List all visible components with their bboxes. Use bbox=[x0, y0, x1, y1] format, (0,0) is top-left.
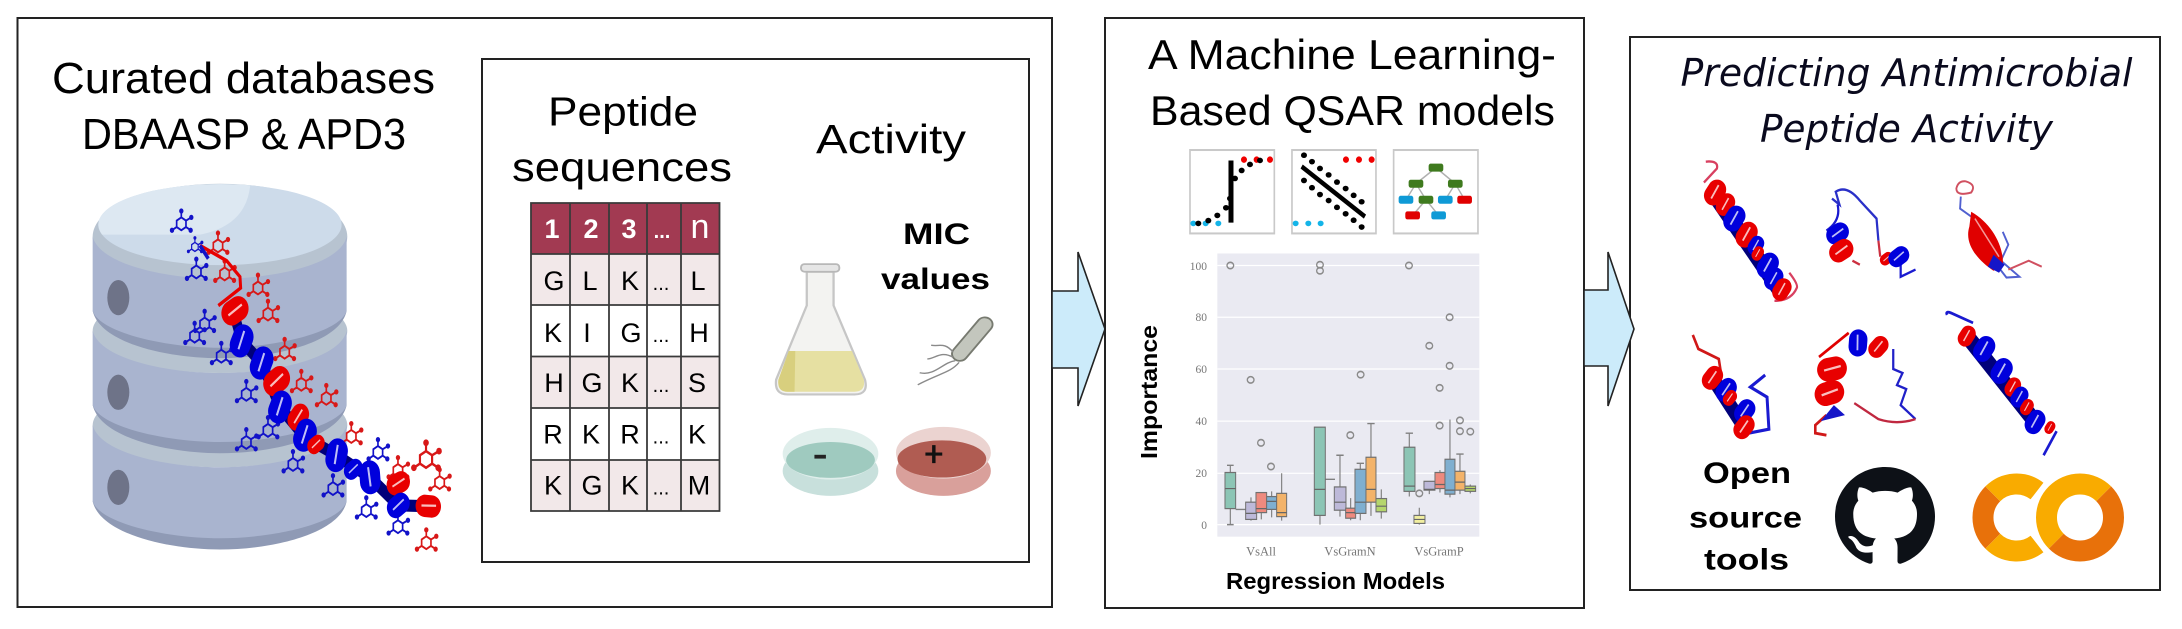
heading: machine learning QSAR models: Based QSAR models bbox=[1150, 87, 1555, 134]
table: peptide sequence matrix: ... bbox=[653, 478, 669, 500]
peptide structure 4 bbox=[1693, 335, 1769, 433]
heading: peptide sequences bbox=[512, 88, 732, 190]
peptide structure 1 bbox=[1704, 161, 1797, 301]
table: peptide sequence matrix: K bbox=[621, 368, 639, 398]
label: open source tools bbox=[1689, 457, 1802, 577]
y axis tick labels: 60 bbox=[1196, 364, 1207, 376]
heading: predicting antimicrobial peptide activity bbox=[1680, 51, 2133, 151]
panel: curated databases bbox=[18, 18, 1052, 607]
table: peptide sequence matrix: H bbox=[544, 368, 564, 398]
table: peptide sequence matrix: K bbox=[544, 318, 562, 348]
heading: predicting antimicrobial peptide activity: Predicting Antimicrobial bbox=[1680, 51, 2133, 95]
table: peptide sequence matrix: G bbox=[543, 266, 565, 296]
panel: QSAR models bbox=[1105, 18, 1584, 608]
table: peptide sequence matrix: L bbox=[582, 266, 598, 296]
table: peptide sequence matrix: G bbox=[581, 470, 603, 500]
icon: logistic regression bbox=[1190, 150, 1274, 233]
heading: activity: Activity bbox=[816, 116, 967, 162]
table: peptide sequence matrix: K bbox=[621, 470, 639, 500]
icon: decision tree bbox=[1394, 150, 1478, 233]
y axis tick labels: 20 bbox=[1196, 468, 1207, 480]
heading: machine learning QSAR models: A Machine Learning- bbox=[1148, 31, 1556, 78]
icon: support vector machine bbox=[1292, 150, 1376, 233]
y axis tick labels bbox=[1190, 261, 1207, 532]
y axis title: Importance bbox=[1136, 325, 1162, 459]
chart: feature importance box plots bbox=[1136, 253, 1479, 594]
icon: petri dish negative bbox=[783, 428, 878, 496]
table: peptide sequence matrix: K bbox=[544, 470, 562, 500]
heading: peptide sequences: sequences bbox=[512, 144, 732, 190]
x axis category labels: VsGramN bbox=[1324, 544, 1376, 558]
x axis title: Regression Models bbox=[1226, 568, 1445, 594]
table: peptide sequence matrix: ... bbox=[653, 426, 669, 448]
table: peptide sequence matrix: G bbox=[620, 318, 642, 348]
icon: Google Colab logo bbox=[1983, 484, 2113, 551]
icon: petri dish positive bbox=[896, 427, 991, 496]
icon: peptide structure with side chains bbox=[171, 209, 451, 551]
heading: curated databases: Curated databases bbox=[52, 54, 435, 103]
table: peptide sequence matrix: G bbox=[581, 368, 603, 398]
label: MIC values bbox=[881, 218, 990, 296]
group: peptide 3D structures bbox=[1693, 161, 2057, 455]
heading: peptide sequences: Peptide bbox=[548, 88, 698, 134]
peptide structure 3 bbox=[1956, 181, 2042, 278]
y axis tick labels: 100 bbox=[1190, 261, 1207, 273]
table: peptide sequence matrix: K bbox=[688, 420, 706, 450]
peptide structure 5 bbox=[1815, 333, 1916, 435]
x axis category labels: VsAll bbox=[1246, 544, 1276, 558]
x axis category labels: VsGramP bbox=[1414, 544, 1464, 558]
table: peptide sequence matrix: M bbox=[688, 470, 710, 500]
table: peptide sequence matrix: ... bbox=[653, 273, 669, 295]
icon: bacterium bbox=[918, 324, 985, 385]
y axis tick labels: 80 bbox=[1196, 312, 1207, 324]
table: peptide sequence matrix: R bbox=[543, 420, 563, 450]
heading: machine learning QSAR models bbox=[1148, 31, 1556, 134]
table: peptide sequence matrix: n bbox=[691, 208, 709, 246]
table: peptide sequence matrix: ... bbox=[654, 221, 670, 243]
table: peptide sequence matrix: R bbox=[620, 420, 640, 450]
y axis tick labels: 40 bbox=[1196, 416, 1207, 428]
heading: curated databases: DBAASP & APD3 bbox=[82, 110, 406, 159]
label: MIC values: values bbox=[881, 263, 990, 296]
table: peptide sequence matrix: L bbox=[690, 266, 706, 296]
peptide structure 2 bbox=[1826, 189, 1916, 277]
table: peptide sequence matrix: 1 bbox=[544, 214, 560, 244]
icon: GitHub logo bbox=[1835, 467, 1935, 564]
heading: predicting antimicrobial peptide activity: Peptide Activity bbox=[1760, 107, 2053, 151]
panel: peptide sequences and activity bbox=[482, 59, 1029, 562]
table: peptide sequence matrix: 2 bbox=[583, 214, 599, 244]
table: peptide sequence matrix: ... bbox=[653, 375, 669, 397]
y axis tick labels: 0 bbox=[1201, 520, 1207, 532]
arrow: models to predictions bbox=[1584, 252, 1634, 406]
icon: culture flask bbox=[776, 264, 866, 394]
arrow: databases to models bbox=[1052, 252, 1105, 406]
heading: curated databases bbox=[52, 54, 435, 159]
table: peptide sequence matrix bbox=[531, 203, 720, 511]
table: peptide sequence matrix: K bbox=[621, 266, 639, 296]
table: peptide sequence matrix: S bbox=[688, 368, 706, 398]
label: open source tools: Open bbox=[1703, 457, 1791, 490]
table: peptide sequence matrix: I bbox=[583, 318, 591, 348]
table: peptide sequence matrix: K bbox=[582, 420, 600, 450]
label: MIC values: MIC bbox=[903, 218, 970, 251]
x axis category labels bbox=[1246, 544, 1464, 558]
icon: database cylinder bbox=[93, 176, 347, 550]
table: peptide sequence matrix: H bbox=[689, 318, 709, 348]
label: open source tools: source bbox=[1689, 502, 1802, 534]
panel: predicting activity bbox=[1630, 37, 2160, 590]
peptide structure 6 bbox=[1947, 312, 2057, 455]
table: peptide sequence matrix: ... bbox=[653, 325, 669, 347]
label: open source tools: tools bbox=[1704, 544, 1789, 577]
table: peptide sequence matrix: 3 bbox=[621, 214, 637, 244]
